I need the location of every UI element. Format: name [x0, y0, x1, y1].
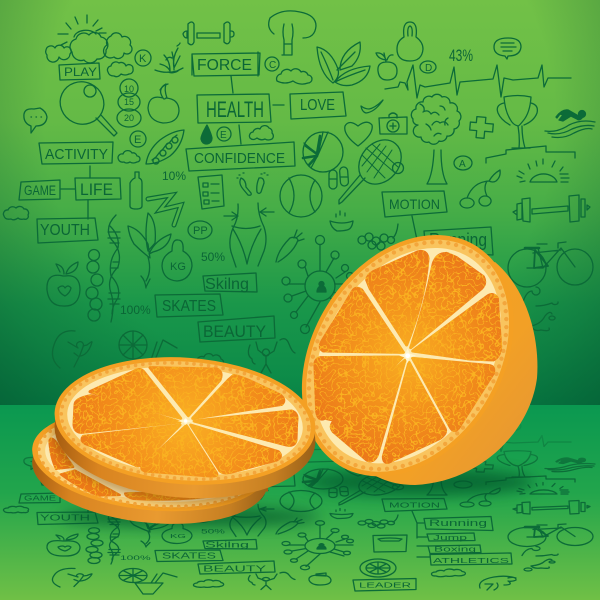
rind: [259, 196, 557, 516]
MOTION label box: [382, 191, 447, 217]
text: coin E two: E: [220, 130, 227, 141]
shadow cast by top slice: [47, 422, 255, 509]
lower slice segments: [49, 438, 220, 500]
icon: heart: [345, 122, 372, 146]
reflected labels: 100%: [120, 555, 151, 562]
icon: bathroom scale: [373, 264, 407, 298]
icon: speech bubble right: [494, 38, 521, 59]
wall vignette: [0, 0, 600, 406]
RUNNING label box: [424, 227, 493, 255]
reflected labels: ACTIVITY: [45, 476, 108, 484]
icon: paddle: [53, 75, 117, 136]
icon: bicycle: [508, 242, 593, 287]
outer pith band: [265, 202, 551, 509]
floor shadow under orange: [305, 468, 535, 496]
icon: water drop: [201, 125, 212, 144]
icon: cloud bottom left: [193, 354, 224, 369]
icon: herb sprig: [155, 43, 183, 73]
text: stack number 10: 10: [124, 84, 134, 94]
icon: pie chart: [303, 132, 343, 172]
icon: cloud low right: [431, 332, 465, 348]
icon: checklist: [198, 175, 224, 209]
text: 10 percent: 10%: [162, 169, 186, 183]
text: PLAY: PLAY: [64, 65, 97, 79]
text: coin A: A: [459, 159, 466, 170]
inner pith: [276, 213, 539, 498]
icon: cherries: [460, 170, 500, 208]
text: PP: PP: [193, 225, 208, 237]
icon: KG kettlebell: [162, 240, 192, 281]
connector game to life: [61, 188, 75, 190]
lower slice inner pith: [41, 409, 259, 511]
icon: leaves: [317, 42, 370, 86]
connector health to confidence: [239, 125, 241, 144]
icon: pills: [329, 167, 349, 189]
icon: bottle: [130, 172, 142, 209]
FORCE label box: [192, 52, 260, 76]
icon: cloud: [118, 151, 140, 163]
icon: gymnast: [52, 331, 92, 368]
lower slice rind: [27, 398, 273, 522]
icon: apple: [148, 84, 179, 123]
icon: grapes: [358, 224, 398, 250]
orange body: [365, 262, 537, 485]
rind dots: [268, 206, 547, 506]
text: HEALTH: HEALTH: [206, 97, 264, 122]
icon: A coin: [454, 156, 472, 170]
icon: K coin: [135, 50, 151, 66]
icon: heartbeat line: [385, 65, 571, 98]
text: YOUTH: YOUTH: [40, 222, 90, 239]
wall doodle labels: [24, 46, 509, 372]
connector motion to list: [412, 216, 430, 308]
icon: PP oval: [188, 221, 212, 239]
icon: E coin two: [217, 127, 231, 141]
icon: orange wheel: [360, 312, 396, 348]
text: Running: Running: [429, 230, 487, 250]
floor shadow under slices: [60, 507, 320, 527]
icon: tomato: [309, 340, 331, 364]
top slice inner pith: [64, 359, 306, 483]
PLAY label box: [59, 63, 100, 80]
icon: cloud far left: [3, 206, 29, 220]
icon: dumbbell right: [513, 195, 590, 222]
reflected icons: [3, 408, 595, 594]
text: coin C: C: [269, 60, 276, 71]
icon: pea pod: [146, 130, 184, 164]
JUMP label box: [427, 260, 475, 276]
reflected labels: PLAY: [64, 436, 98, 443]
text: KG: KG: [170, 261, 186, 273]
icon: C coin: [265, 57, 279, 71]
text: CONFIDENCE: CONFIDENCE: [194, 150, 285, 167]
top slice segments: [74, 368, 297, 476]
segments: [315, 251, 501, 462]
text: SKATES: SKATES: [162, 298, 216, 315]
icon: plus: [469, 116, 494, 139]
icon: pearl column: [86, 250, 103, 321]
CONFIDENCE label box: [186, 142, 295, 171]
icon: trophy: [486, 96, 575, 163]
icon: rising sun: [517, 159, 569, 182]
GAME label box: [19, 180, 60, 200]
icon: E coin: [130, 131, 146, 147]
text: stack number 20: 20: [124, 113, 134, 123]
icon: numbered stack: [117, 79, 141, 127]
icon: boxing glove doodle: [269, 11, 316, 55]
ACTIVITY label box: [39, 142, 113, 164]
ATHLETICS label box: [430, 300, 512, 324]
icon: first aid kit: [379, 113, 407, 134]
reflected labels: Jump: [433, 533, 467, 542]
icon: D coin: [420, 61, 436, 73]
reflected labels: Skilng: [205, 541, 249, 549]
reflected labels: KG: [170, 533, 186, 539]
background wall: [0, 0, 600, 406]
text: ACTIVITY: ACTIVITY: [45, 146, 108, 163]
icon: network diagram: [282, 236, 354, 334]
reflected labels: ATHLETICS: [433, 556, 509, 565]
icon: steaming bowl: [330, 211, 353, 231]
text: ATHLETICS: ATHLETICS: [433, 307, 509, 324]
LEADER label box: [353, 351, 416, 376]
reflected labels: SKATES: [162, 552, 216, 560]
top slice rind: [50, 349, 320, 493]
lower orange slice: [32, 422, 268, 524]
core highlight: [399, 348, 416, 363]
text: stack number 15: 15: [124, 97, 134, 107]
text: 43 percent: 43%: [449, 46, 473, 65]
text: Jump: Jump: [433, 261, 467, 278]
background floor: [0, 405, 600, 600]
icon: stethoscope: [522, 287, 558, 336]
icon: check mark: [361, 100, 383, 113]
top orange slice: [50, 349, 320, 507]
SKILNG label box: [203, 273, 257, 292]
icon: cloud: [277, 69, 312, 84]
text: coin K: K: [139, 53, 147, 65]
reflected labels: [24, 496, 508, 588]
top slice core highlight: [177, 418, 193, 425]
icon: small cloud: [107, 62, 133, 77]
reflected labels: LEADER: [359, 582, 411, 589]
icon: waist with arrows: [224, 203, 274, 267]
icon: apple with heart: [47, 262, 80, 306]
lower slice side: [27, 411, 273, 535]
icon: sun and clouds: [46, 15, 132, 63]
text: 50 percent: 50%: [201, 250, 225, 264]
LOVE label box: [290, 92, 346, 119]
icon: dumbbell: [183, 22, 234, 45]
text: coin E: E: [134, 134, 141, 146]
floor reflection of doodles: [3, 408, 595, 594]
text: FORCE: FORCE: [197, 57, 252, 74]
icon: tennis racket: [339, 131, 410, 204]
icon: measuring tape: [148, 195, 181, 225]
icon: footprints: [237, 173, 268, 195]
reflected labels: Running: [429, 518, 487, 529]
icon: small apple: [376, 53, 397, 80]
icon: kettlebell top: [397, 22, 423, 61]
reflected labels: PP: [193, 515, 208, 521]
text: LOVE: LOVE: [300, 97, 335, 114]
YOUTH label box: [37, 218, 98, 243]
connector life to youth: [87, 200, 89, 219]
icon: swimmer: [545, 110, 595, 138]
text: coin D: D: [425, 63, 432, 74]
lower slice rind dots: [34, 403, 266, 517]
connector health to love: [273, 104, 284, 106]
icon: tennis ball: [280, 175, 322, 217]
icon: cloud right: [249, 126, 273, 140]
icon: carrot: [276, 230, 304, 262]
text: BEAUTY: BEAUTY: [203, 322, 266, 341]
reflected labels: GAME: [24, 495, 56, 502]
lower slice pith: [33, 402, 267, 518]
icon: DNA helix: [108, 215, 120, 322]
icon: cocktail: [119, 331, 177, 382]
connector activity to life: [89, 166, 91, 178]
text: LIFE: LIFE: [80, 180, 113, 199]
text: Boxing: Boxing: [434, 284, 476, 301]
reflected labels: BEAUTY: [203, 564, 266, 573]
icon: speech bubble: [24, 108, 47, 133]
reflected labels: 50%: [201, 528, 226, 535]
top slice rind dots: [57, 355, 313, 487]
LIFE label box: [75, 178, 121, 200]
HEALTH label box: [197, 94, 271, 123]
connector force to health: [231, 76, 233, 93]
orange cut face: [259, 196, 557, 516]
SKATES label box: [155, 294, 223, 317]
BOXING label box: [428, 284, 481, 301]
icon: cheering person: [248, 339, 295, 373]
reflected labels: YOUTH: [40, 514, 90, 522]
text: 100 percent: 100%: [120, 303, 151, 317]
top slice side: [50, 362, 320, 507]
top slice outer pith: [55, 353, 315, 489]
text: Skilng: Skilng: [205, 276, 249, 293]
wall doodle icons: [3, 11, 595, 382]
reflected labels: Boxing: [434, 545, 476, 553]
reflected labels: MOTION: [389, 502, 440, 509]
text: LEADER: LEADER: [359, 356, 411, 372]
icon: leaf plant: [128, 213, 171, 288]
icon: tree: [411, 94, 461, 184]
text: GAME: GAME: [24, 182, 56, 198]
text: MOTION: MOTION: [389, 196, 440, 212]
icon: dancer doodle: [480, 346, 516, 374]
big orange half: [259, 196, 557, 516]
BEAUTY label box: [198, 316, 275, 342]
